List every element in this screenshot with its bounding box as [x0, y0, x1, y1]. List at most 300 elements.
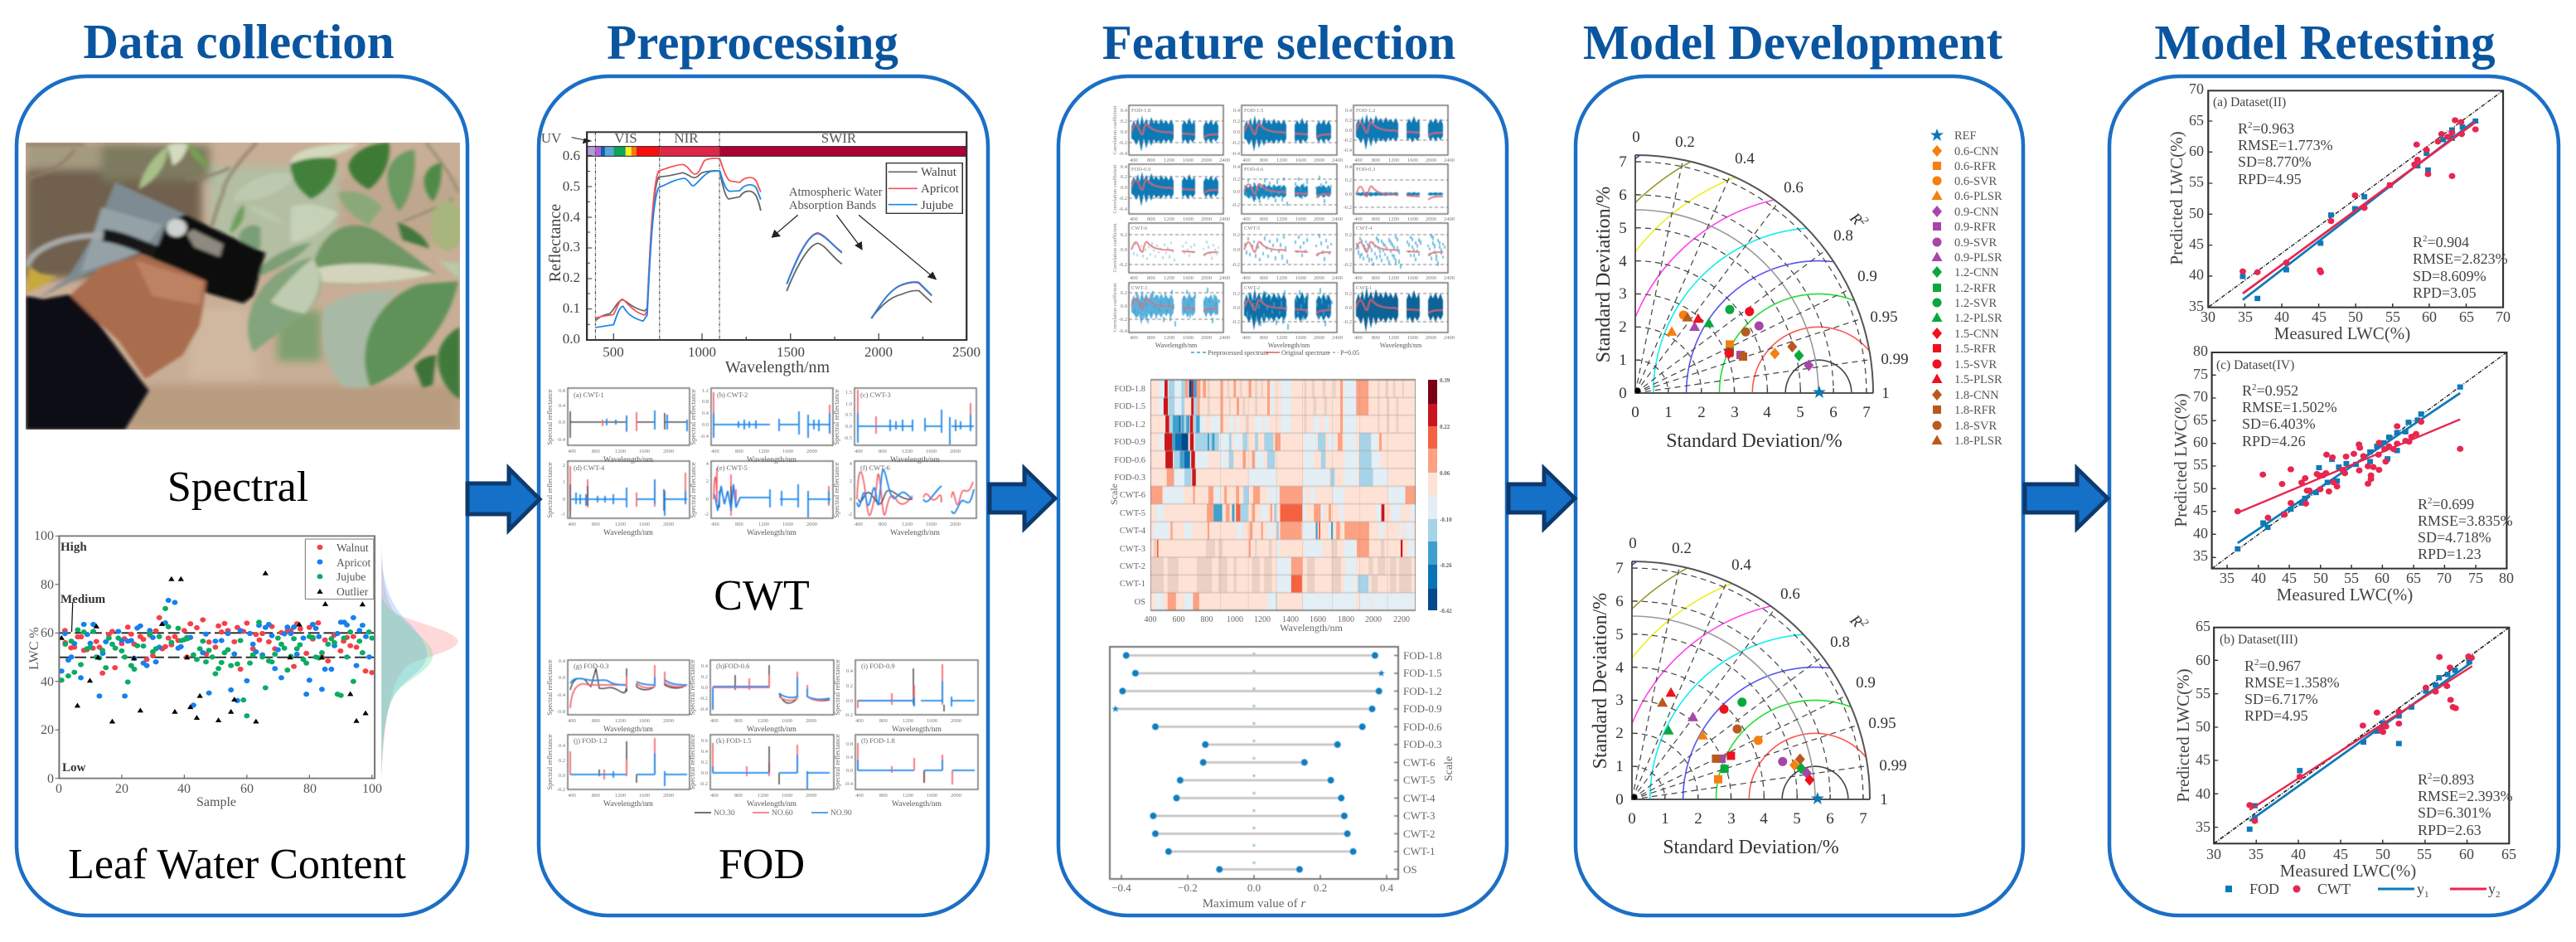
- tick labels: 55: [2385, 308, 2400, 325]
- plot: FOD-0.9: 1600: [927, 718, 937, 724]
- plot: FOD-0.3 correlation: 2400: [1444, 216, 1455, 222]
- legend: FOD, CWT, fit lines: 1: [2424, 890, 2428, 900]
- text: FOD: FOD: [719, 841, 805, 888]
- plot: CWT-4 correlation: [1344, 223, 1455, 281]
- plot: CWT-2: -0.4: [700, 434, 709, 439]
- plot: CWT-1 correlation: 2400: [1444, 335, 1455, 341]
- legend: sample numbers: [695, 809, 852, 818]
- legend: FOD model markers: 0.6-CNN: [1954, 145, 1999, 158]
- stats: CWT: =0.904: [2428, 234, 2469, 250]
- legend: FOD, CWT, fit lines: y: [2417, 881, 2424, 897]
- arrow: model development to model retesting: [2025, 469, 2108, 528]
- plot: FOD-1.5: 400: [710, 793, 719, 799]
- plot: CWT-5: 800: [735, 522, 743, 527]
- plot: CWT-4 correlation: CWT-4: [1356, 226, 1373, 231]
- stats: CWT: =0.699: [2433, 496, 2474, 512]
- tick labels: 45: [2196, 751, 2210, 768]
- photo: spectrometer probe held at walnut leaves: [26, 143, 463, 430]
- axis and correlation labels: R: [1846, 612, 1866, 631]
- plot: FOD-0.3: -0.4: [557, 692, 566, 698]
- dumbbell x axis: 0.4: [1380, 881, 1394, 894]
- small multiples: correlation coefficient plots: [1112, 105, 1455, 357]
- axis and correlation labels: 2: [1694, 810, 1702, 828]
- axis and correlation labels: 0.4: [1731, 556, 1751, 574]
- tick labels: 70: [2189, 80, 2204, 97]
- axis titles: [2171, 393, 2413, 605]
- axis and correlation labels: 3: [1727, 810, 1736, 828]
- plot: FOD-1.8: [833, 734, 978, 808]
- plot: FOD-0.9 correlation: 1600: [1183, 216, 1194, 222]
- heatmap x axis: 400: [1144, 615, 1157, 624]
- dumbbell scale labels: CWT-4: [1403, 792, 1436, 804]
- heatmap x axis: 1800: [1338, 615, 1354, 624]
- plot: CWT-6: -2: [848, 512, 852, 517]
- legend: FOD model markers: REF: [1954, 129, 1977, 143]
- plot: CWT-2: 1600: [782, 449, 793, 454]
- plot: CWT-4: 2: [563, 463, 565, 469]
- plot: FOD-0.3 correlation: 0.2: [1345, 177, 1352, 183]
- x axis labels: 100: [362, 782, 382, 796]
- plot: CWT-1: 400: [568, 449, 576, 454]
- axis and correlation labels: 0: [1631, 404, 1639, 421]
- plot: FOD-0.6: (h)FOD-0.6: [716, 662, 749, 670]
- legend: FOD model markers: 0.9-PLSR: [1954, 251, 2002, 265]
- plot: FOD-1.5 correlation: 0.4: [1233, 108, 1241, 114]
- tick labels: 40: [2251, 570, 2266, 586]
- plot: FOD-0.6 correlation: -0.2: [1232, 202, 1240, 208]
- y axis labels: 80: [41, 578, 54, 592]
- dumbbell scale labels: [1403, 649, 1455, 876]
- stats: CWT: RPD=1.23: [2418, 546, 2482, 562]
- plot: CWT-3 correlation: 0.0: [1121, 303, 1127, 309]
- stats: FOD: 2: [2248, 120, 2253, 130]
- axis and correlation labels: 5: [1796, 404, 1804, 421]
- legend: Outlier: [337, 585, 369, 598]
- legend: species: [921, 166, 960, 212]
- plot: FOD-1.2: [545, 734, 690, 808]
- level labels: High: [61, 541, 87, 554]
- stats: FOD: =0.952: [2257, 382, 2298, 399]
- band names: [541, 130, 857, 146]
- tick labels: 35: [2238, 308, 2253, 325]
- tick labels: 55: [2189, 173, 2204, 190]
- level labels: Medium: [61, 593, 106, 606]
- plot: CWT-6 correlation: -0.2: [1119, 262, 1127, 268]
- plot: CWT-3 correlation: 2400: [1219, 335, 1230, 341]
- stats: FOD: RPD=4.95: [2238, 171, 2302, 187]
- tick labels: 35: [2193, 547, 2208, 564]
- axis and correlation labels: 0.6: [1784, 179, 1804, 197]
- stats: FOD: RPD=4.26: [2242, 433, 2306, 449]
- small multiples: FOD orders: [545, 658, 978, 818]
- plot: CWT-2 correlation: 2000: [1314, 335, 1324, 341]
- plot: CWT-6 correlation: 2000: [1201, 275, 1212, 281]
- stats: FOD: 2: [2252, 382, 2257, 392]
- tick labels: 65: [2196, 618, 2210, 634]
- legend: FOD model markers: 1.2-RFR: [1954, 282, 1997, 295]
- axis and correlation labels: 4: [1763, 404, 1771, 421]
- stats: CWT: R: [2413, 234, 2423, 250]
- plot: CWT-4: Spectral reflectance: [545, 462, 554, 518]
- plot: FOD-0.3 correlation: 1200: [1388, 216, 1399, 222]
- chart: correlation heatmap: [1108, 377, 1452, 634]
- heatmap x axis: 1600: [1310, 615, 1326, 624]
- plot: FOD-0.6: 800: [734, 718, 743, 724]
- heatmap x axis: 2000: [1365, 615, 1382, 624]
- plot: CWT-3 correlation: -0.2: [1119, 317, 1127, 323]
- plot: FOD-0.9: -0.2: [845, 712, 853, 718]
- plot: FOD-0.3: Wavelength/nm: [603, 726, 654, 734]
- stats: CWT: 2: [2423, 234, 2428, 244]
- heatmap x axis: 1000: [1227, 615, 1243, 624]
- tick labels: 60: [2375, 570, 2390, 586]
- plot: CWT-1: 2000: [663, 449, 674, 454]
- stats: FOD: R: [2242, 382, 2252, 399]
- plot: CWT-3 correlation: [1112, 283, 1230, 341]
- x axis: 1500: [777, 344, 805, 360]
- y axis: 0.1: [563, 300, 580, 316]
- stats: CWT: R: [2418, 496, 2428, 512]
- heatmap cells: [1150, 380, 1416, 610]
- colour bar: 0.22: [1440, 424, 1450, 430]
- band names: NIR: [674, 130, 699, 146]
- heatmap row labels: OS: [1135, 598, 1145, 607]
- plot: FOD-0.6: 0.0: [701, 685, 708, 691]
- legend: spectrum types: Original spectrum: [1281, 349, 1330, 357]
- y axis: 0.6: [563, 148, 580, 163]
- plot: CWT-3 correlation: 0.2: [1121, 290, 1127, 296]
- x axis: 500: [603, 344, 624, 360]
- diagram grid and curves: [1631, 561, 1870, 799]
- plot: FOD-1.5: Wavelength/nm: [747, 800, 797, 808]
- plot: FOD-1.2 correlation: 0.4: [1345, 108, 1353, 114]
- plot: CWT-3: 1.5: [845, 390, 852, 396]
- legend: species: Apricot: [921, 182, 960, 196]
- plot: CWT-1: 0.4: [559, 403, 566, 409]
- axis and correlation labels: 1: [1664, 404, 1673, 421]
- legend: FOD model markers: 0.6-RFR: [1954, 160, 1997, 173]
- tick labels: 45: [2189, 236, 2204, 252]
- dumbbell x axis: Maximum value of r: [1203, 897, 1305, 910]
- stats: CWT: [2418, 771, 2513, 838]
- dataset label: (b) Dataset(III): [2220, 633, 2298, 647]
- plot: FOD-0.6 correlation: 2400: [1332, 216, 1343, 222]
- heatmap x axis: 600: [1172, 615, 1185, 624]
- plot: FOD-0.6: -0.4: [700, 706, 709, 712]
- axis and correlation labels: 6: [1829, 404, 1838, 421]
- scatter data with distribution curves: [56, 536, 458, 779]
- plot: FOD-0.3: [545, 658, 690, 734]
- chart: Taylor diagram CWT: [1590, 535, 2576, 942]
- x axis: 1000: [688, 344, 716, 360]
- legend: FOD model markers: 1.5-CNN: [1954, 328, 1999, 341]
- legend: sample numbers: NO.90: [830, 809, 852, 818]
- plot: FOD-1.2: 400: [568, 793, 576, 799]
- plot: CWT-5: [689, 461, 833, 537]
- x axis labels: Sample: [196, 795, 236, 809]
- plot: FOD-0.3 correlation: 800: [1372, 216, 1380, 222]
- legend: spectrum types: [1191, 349, 1359, 357]
- dumbbell scale labels: FOD-1.5: [1403, 667, 1442, 679]
- tick labels: 35: [2189, 298, 2204, 314]
- legend: sample numbers: NO.30: [714, 809, 735, 818]
- plot: CWT-4: 1: [563, 479, 565, 485]
- tick labels: 65: [2193, 411, 2208, 428]
- stats: CWT: SD=4.718%: [2418, 529, 2491, 546]
- axis and correlation labels: 6: [1826, 810, 1834, 828]
- plot: FOD-1.5: 0.2: [701, 760, 708, 765]
- plot: FOD-0.6: 1600: [782, 718, 792, 724]
- axis and correlation labels: 0.9: [1857, 268, 1877, 285]
- tick labels: 60: [2196, 652, 2210, 668]
- plot: FOD-1.5: (k) FOD-1.5: [716, 736, 751, 745]
- plot: CWT-1: [545, 388, 690, 464]
- panel: data collection: [17, 76, 467, 915]
- plot: FOD-1.5 correlation: 0.0: [1233, 129, 1240, 135]
- plot: CWT-3: 1.0: [845, 401, 852, 407]
- plot: CWT-1: 1200: [615, 449, 626, 454]
- plot: FOD-0.6 correlation: [1232, 164, 1343, 222]
- axis and correlation labels: 0: [1632, 129, 1640, 146]
- stats: FOD: [2238, 120, 2333, 187]
- plot: CWT-6: 800: [879, 522, 887, 527]
- axis titles: Measured LWC(%): [2280, 861, 2416, 881]
- panel: model development: [467, 76, 2576, 942]
- heatmap row labels: FOD-1.8: [1114, 385, 1145, 394]
- stats: CWT: RPD=2.63: [2418, 822, 2482, 838]
- colour bar: -0.10: [1440, 517, 1452, 523]
- axis and correlation labels: Standard Deviation/%: [1590, 593, 1611, 769]
- plot: FOD-1.2: 1600: [639, 793, 650, 799]
- plot: FOD-0.6 correlation: 800: [1260, 216, 1268, 222]
- plot: CWT-2: 0.0: [702, 422, 709, 428]
- stats: FOD: 2: [2254, 658, 2259, 668]
- legend: FOD model markers: 0.9-RFR: [1954, 221, 1997, 234]
- chart: leaf water content scatter: [27, 529, 458, 809]
- plot: FOD-1.2 correlation: 2000: [1426, 158, 1436, 163]
- plot: CWT-5 correlation: 1200: [1276, 275, 1287, 281]
- plot: FOD-1.2 correlation: 0.2: [1345, 118, 1352, 124]
- plot: CWT-5 correlation: -0.2: [1232, 262, 1240, 268]
- plot: FOD-1.2 correlation: 2400: [1444, 158, 1455, 163]
- plot: CWT-6 correlation: Correlation coefficient: [1112, 223, 1118, 272]
- plot: FOD-0.3: 800: [592, 718, 600, 724]
- plot: CWT-6 correlation: 1200: [1164, 275, 1174, 281]
- plot: FOD-1.2 correlation: -0.4: [1344, 148, 1353, 153]
- plot: CWT-5: 4: [706, 461, 709, 467]
- y axis: [546, 148, 580, 347]
- stats: CWT: 2: [2428, 496, 2433, 506]
- axis and correlation labels: 0.8: [1830, 634, 1850, 651]
- plot: FOD-1.8 correlation: Correlation coefficient: [1112, 105, 1118, 154]
- plot: CWT-5 correlation: 2400: [1332, 275, 1343, 281]
- axis and correlation labels: 7: [1615, 560, 1624, 577]
- x axis labels: 60: [240, 782, 254, 796]
- heading: Data collection: Data collection: [83, 14, 395, 69]
- heatmap x axis: 1400: [1282, 615, 1299, 624]
- x axis labels: 20: [115, 782, 128, 796]
- plot: FOD-0.9 correlation: 2400: [1219, 216, 1230, 222]
- heatmap x axis: 1200: [1254, 615, 1271, 624]
- plot: FOD-0.9: 400: [855, 718, 864, 724]
- tick labels: 65: [2459, 308, 2474, 325]
- plot: FOD-1.5: 2000: [806, 793, 816, 799]
- plot: CWT-6 correlation: 2400: [1219, 275, 1230, 281]
- plot: CWT-1 correlation: 1200: [1388, 335, 1399, 341]
- plot: FOD-0.9: 800: [879, 718, 888, 724]
- tick labels: 60: [2189, 143, 2204, 159]
- legend: FOD model markers: [1930, 129, 2002, 448]
- plot: FOD-1.5 correlation: 1600: [1295, 158, 1306, 163]
- plot: FOD-1.5 correlation: -0.4: [1232, 151, 1241, 157]
- frame and range bars: [1110, 647, 1398, 879]
- stats: FOD: [2242, 382, 2337, 449]
- axis and correlation labels: 5: [1793, 810, 1801, 828]
- axis and correlation labels: 2: [1859, 616, 1871, 629]
- plot: CWT-4 correlation: 0.2: [1345, 232, 1352, 238]
- plot: FOD-1.8 correlation: 400: [1130, 158, 1138, 163]
- panel: preprocessing: [539, 76, 988, 915]
- tick labels: 35: [2220, 570, 2235, 586]
- plot: FOD-1.2 correlation: -0.2: [1344, 138, 1352, 143]
- plot: CWT-4: 2000: [663, 522, 674, 527]
- y axis: 0.5: [563, 178, 580, 194]
- plot: CWT-3: 0.5: [845, 412, 852, 418]
- tick labels: 40: [2196, 785, 2210, 802]
- tick labels: 50: [2348, 308, 2363, 325]
- plot: FOD-0.3 correlation: 0.0: [1345, 192, 1352, 197]
- plot: FOD-0.6: Wavelength/nm: [747, 726, 797, 734]
- plot: FOD-1.5 correlation: FOD-1.5: [1244, 108, 1263, 114]
- plot: CWT-5 correlation: 0.0: [1233, 247, 1240, 253]
- plot: CWT-2 correlation: 0.2: [1233, 291, 1240, 297]
- plot: FOD-1.5 correlation: 2000: [1314, 158, 1324, 163]
- axis and correlation labels: 2: [1615, 725, 1624, 742]
- plot: FOD-0.9: 1200: [903, 718, 913, 724]
- plot: FOD-1.8: 0.0: [846, 768, 853, 774]
- stats: FOD: SD=6.403%: [2242, 415, 2316, 432]
- axis titles: Predicted LWC(%): [2167, 131, 2186, 265]
- plot: FOD-1.8: Spectral reflectance: [833, 734, 841, 790]
- plot: FOD-1.2 correlation: 1200: [1388, 158, 1399, 163]
- plot: FOD-1.8 correlation: 0.4: [1121, 108, 1128, 114]
- axis titles: Wavelength/nm: [1155, 342, 1198, 349]
- plot: FOD-1.5: Spectral reflectance: [688, 734, 696, 790]
- stats: CWT: SD=6.301%: [2418, 804, 2491, 821]
- legend: FOD, CWT, fit lines: [2225, 881, 2500, 900]
- axis and correlation labels: 3: [1619, 285, 1627, 303]
- plot: CWT-3 correlation: 400: [1130, 335, 1138, 341]
- plot: CWT-3 correlation: 2000: [1201, 335, 1212, 341]
- tick labels: 65: [2406, 570, 2421, 586]
- plot: FOD-1.8: (l) FOD-1.8: [861, 736, 895, 745]
- arrow: preprocessing to feature selection: [990, 469, 1055, 528]
- axis and correlation labels: 4: [1615, 659, 1624, 677]
- tick labels: [2196, 618, 2516, 862]
- plot: CWT-6 correlation: 1600: [1183, 275, 1194, 281]
- plot: FOD-1.2 correlation: 0.0: [1345, 128, 1352, 134]
- heatmap row labels: FOD-0.9: [1114, 438, 1145, 447]
- plot: CWT-1 correlation: CWT-1: [1356, 285, 1372, 291]
- plot: CWT-6: 0: [850, 497, 852, 503]
- heading: Model Development: Model Development: [1583, 15, 2003, 70]
- plot: CWT-3 correlation: 1200: [1164, 335, 1174, 341]
- plot: FOD-0.9 correlation: FOD-0.9: [1131, 167, 1150, 172]
- axis and correlation labels: 0: [1629, 535, 1637, 552]
- band names: UV: [541, 130, 562, 146]
- tick labels: 80: [2499, 570, 2514, 586]
- plot: CWT-1: 800: [592, 449, 600, 454]
- legend: FOD model markers: 0.6-PLSR: [1954, 190, 2002, 203]
- axis and correlation labels: Standard Deviation/%: [1666, 430, 1842, 452]
- stats: CWT: R: [2418, 771, 2428, 788]
- plot: FOD-1.2 correlation: FOD-1.2: [1356, 108, 1375, 114]
- small multiples: CWT scales: [545, 388, 976, 537]
- plot: FOD-1.5 correlation: -0.2: [1232, 140, 1240, 146]
- tick labels: 60: [2193, 434, 2208, 450]
- plot: FOD-0.6: 400: [710, 718, 719, 724]
- plot: FOD-0.9 correlation: [1112, 164, 1230, 222]
- dumbbell scale labels: OS: [1403, 863, 1417, 876]
- tick labels: 55: [2196, 685, 2210, 702]
- plot: CWT-5 correlation: [1232, 223, 1343, 281]
- plot: FOD-1.8: 0.4: [846, 755, 854, 760]
- axis and correlation labels: 0.2: [1672, 540, 1692, 557]
- plot: FOD-1.5: 1600: [782, 793, 792, 799]
- tick labels: 50: [2193, 479, 2208, 496]
- plot: FOD-0.9 correlation: 2000: [1201, 216, 1212, 222]
- plot: CWT-4 correlation: 2000: [1426, 275, 1436, 281]
- plot: FOD-0.3: 1200: [615, 718, 626, 724]
- plot: CWT-6 correlation: 0.2: [1121, 232, 1127, 238]
- plot: CWT-4: 1200: [615, 522, 626, 527]
- plot: FOD-1.5 correlation: 0.2: [1233, 119, 1240, 124]
- plot: FOD-0.9: 0.4: [846, 668, 854, 674]
- legend: Apricot: [337, 556, 370, 569]
- plot: CWT-2 correlation: -0.2: [1232, 319, 1240, 325]
- plot: CWT-2: Wavelength/nm: [747, 456, 797, 464]
- plot: FOD-1.2: Spectral reflectance: [545, 734, 554, 790]
- plot: FOD-1.2 correlation: 1600: [1407, 158, 1418, 163]
- plot: CWT-4: 1600: [639, 522, 650, 527]
- axis and correlation labels: 3: [1731, 404, 1739, 421]
- plot: FOD-1.2: 0.2: [559, 758, 565, 764]
- plot: FOD-0.6: 0.4: [701, 663, 709, 669]
- plot: FOD-1.5: 1200: [758, 793, 768, 799]
- tick labels: 60: [2459, 846, 2474, 862]
- plot: CWT-4 correlation: 1200: [1388, 275, 1399, 281]
- dumbbell scale labels: CWT-1: [1403, 845, 1436, 857]
- plot: CWT-6: 1200: [902, 522, 913, 527]
- legend: FOD, CWT, fit lines: FOD: [2249, 881, 2279, 897]
- tick labels: 80: [2193, 342, 2208, 359]
- plot: CWT-6 correlation: 400: [1130, 275, 1138, 281]
- plot: FOD-0.3 correlation: 0.4: [1345, 164, 1353, 170]
- plot: FOD-0.3: -0.8: [557, 709, 565, 715]
- plot: CWT-3: 0.0: [845, 424, 852, 430]
- y axis: 0.4: [563, 209, 580, 225]
- plot: FOD-0.3 correlation: 2000: [1426, 216, 1436, 222]
- level labels: Low: [62, 761, 86, 774]
- plot: CWT-6: 400: [855, 522, 863, 527]
- axis and correlation labels: 4: [1619, 253, 1627, 270]
- plot: FOD-1.8: -0.4: [845, 781, 854, 787]
- tick labels: 35: [2196, 818, 2210, 835]
- dumbbell scale labels: FOD-1.2: [1403, 685, 1442, 697]
- axis and correlation labels: 6: [1615, 593, 1624, 610]
- tick labels: 70: [2496, 308, 2511, 325]
- plot: FOD-1.8: 1600: [927, 793, 937, 799]
